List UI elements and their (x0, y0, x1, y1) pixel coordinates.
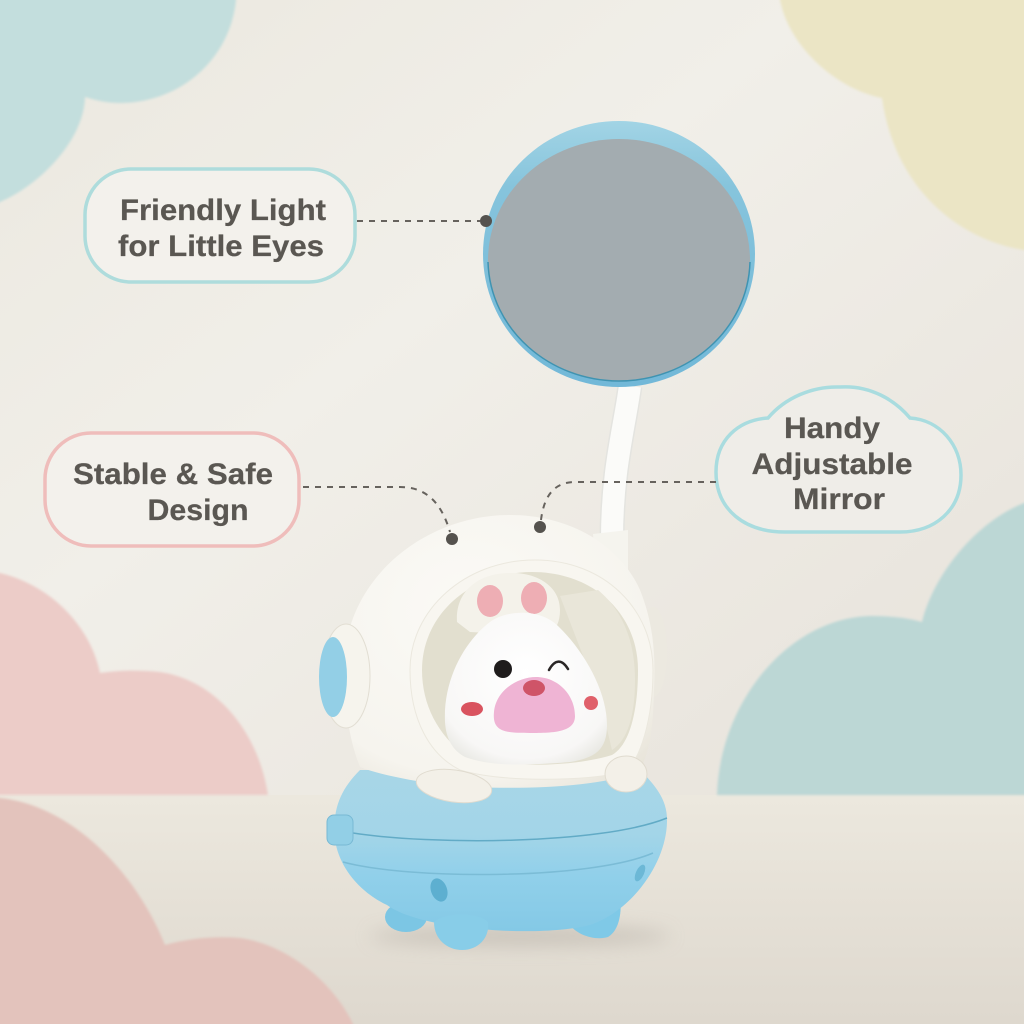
cloud: right teal (717, 495, 1024, 795)
bunny nose (523, 680, 545, 696)
visor interior (422, 572, 638, 765)
floor (0, 795, 1024, 1024)
connector: friendly light (357, 215, 492, 227)
side hole (633, 863, 647, 883)
label: stable and safe: Stable & Safe (73, 458, 273, 491)
base seam (353, 818, 667, 841)
bunny open eye (494, 660, 512, 678)
callout: stable and safe (45, 433, 299, 546)
bunny body (445, 613, 607, 765)
side switch (327, 815, 353, 845)
bunny wink (549, 662, 568, 670)
mirror bezel line (488, 262, 750, 381)
center foot (434, 914, 488, 950)
speaker hole (427, 876, 451, 904)
bunny muzzle (494, 677, 575, 733)
inner wall block (560, 590, 635, 750)
callout: friendly light: for Little Eyes (118, 230, 324, 263)
left ear cup (319, 624, 370, 728)
label: friendly light: Friendly Light (120, 194, 326, 227)
helmet (345, 515, 654, 788)
left paw (414, 765, 494, 807)
bunny cheeks (461, 702, 483, 716)
cloud: top right yellow (780, 0, 1024, 255)
callout: adjustable mirror: Adjustable (752, 448, 912, 481)
right ear cup (639, 607, 667, 697)
callout: adjustable mirror (716, 387, 961, 532)
mirror face (488, 139, 750, 381)
cloud: bottom left pink (0, 795, 353, 1024)
contact shadow (370, 926, 670, 946)
callout: stable and safe: Design (148, 494, 248, 527)
callout: adjustable mirror: Mirror (793, 483, 885, 516)
background wall (0, 0, 1024, 800)
right paw (605, 756, 647, 792)
connector: stable and safe (303, 487, 458, 545)
lamp product (319, 121, 755, 950)
visor rim (410, 560, 653, 779)
bunny (445, 573, 607, 765)
saucer base (334, 770, 667, 931)
cloud: left pink (0, 570, 268, 795)
cloud: top left teal (0, 0, 236, 210)
bunny ears (457, 573, 560, 636)
label: adjustable mirror: Handy (784, 412, 880, 445)
connector: adjustable mirror (534, 482, 716, 533)
neck socket (593, 530, 628, 590)
lamp head (483, 121, 755, 387)
flexible neck (612, 386, 630, 540)
callout: friendly light (85, 169, 355, 282)
feet (385, 897, 621, 938)
